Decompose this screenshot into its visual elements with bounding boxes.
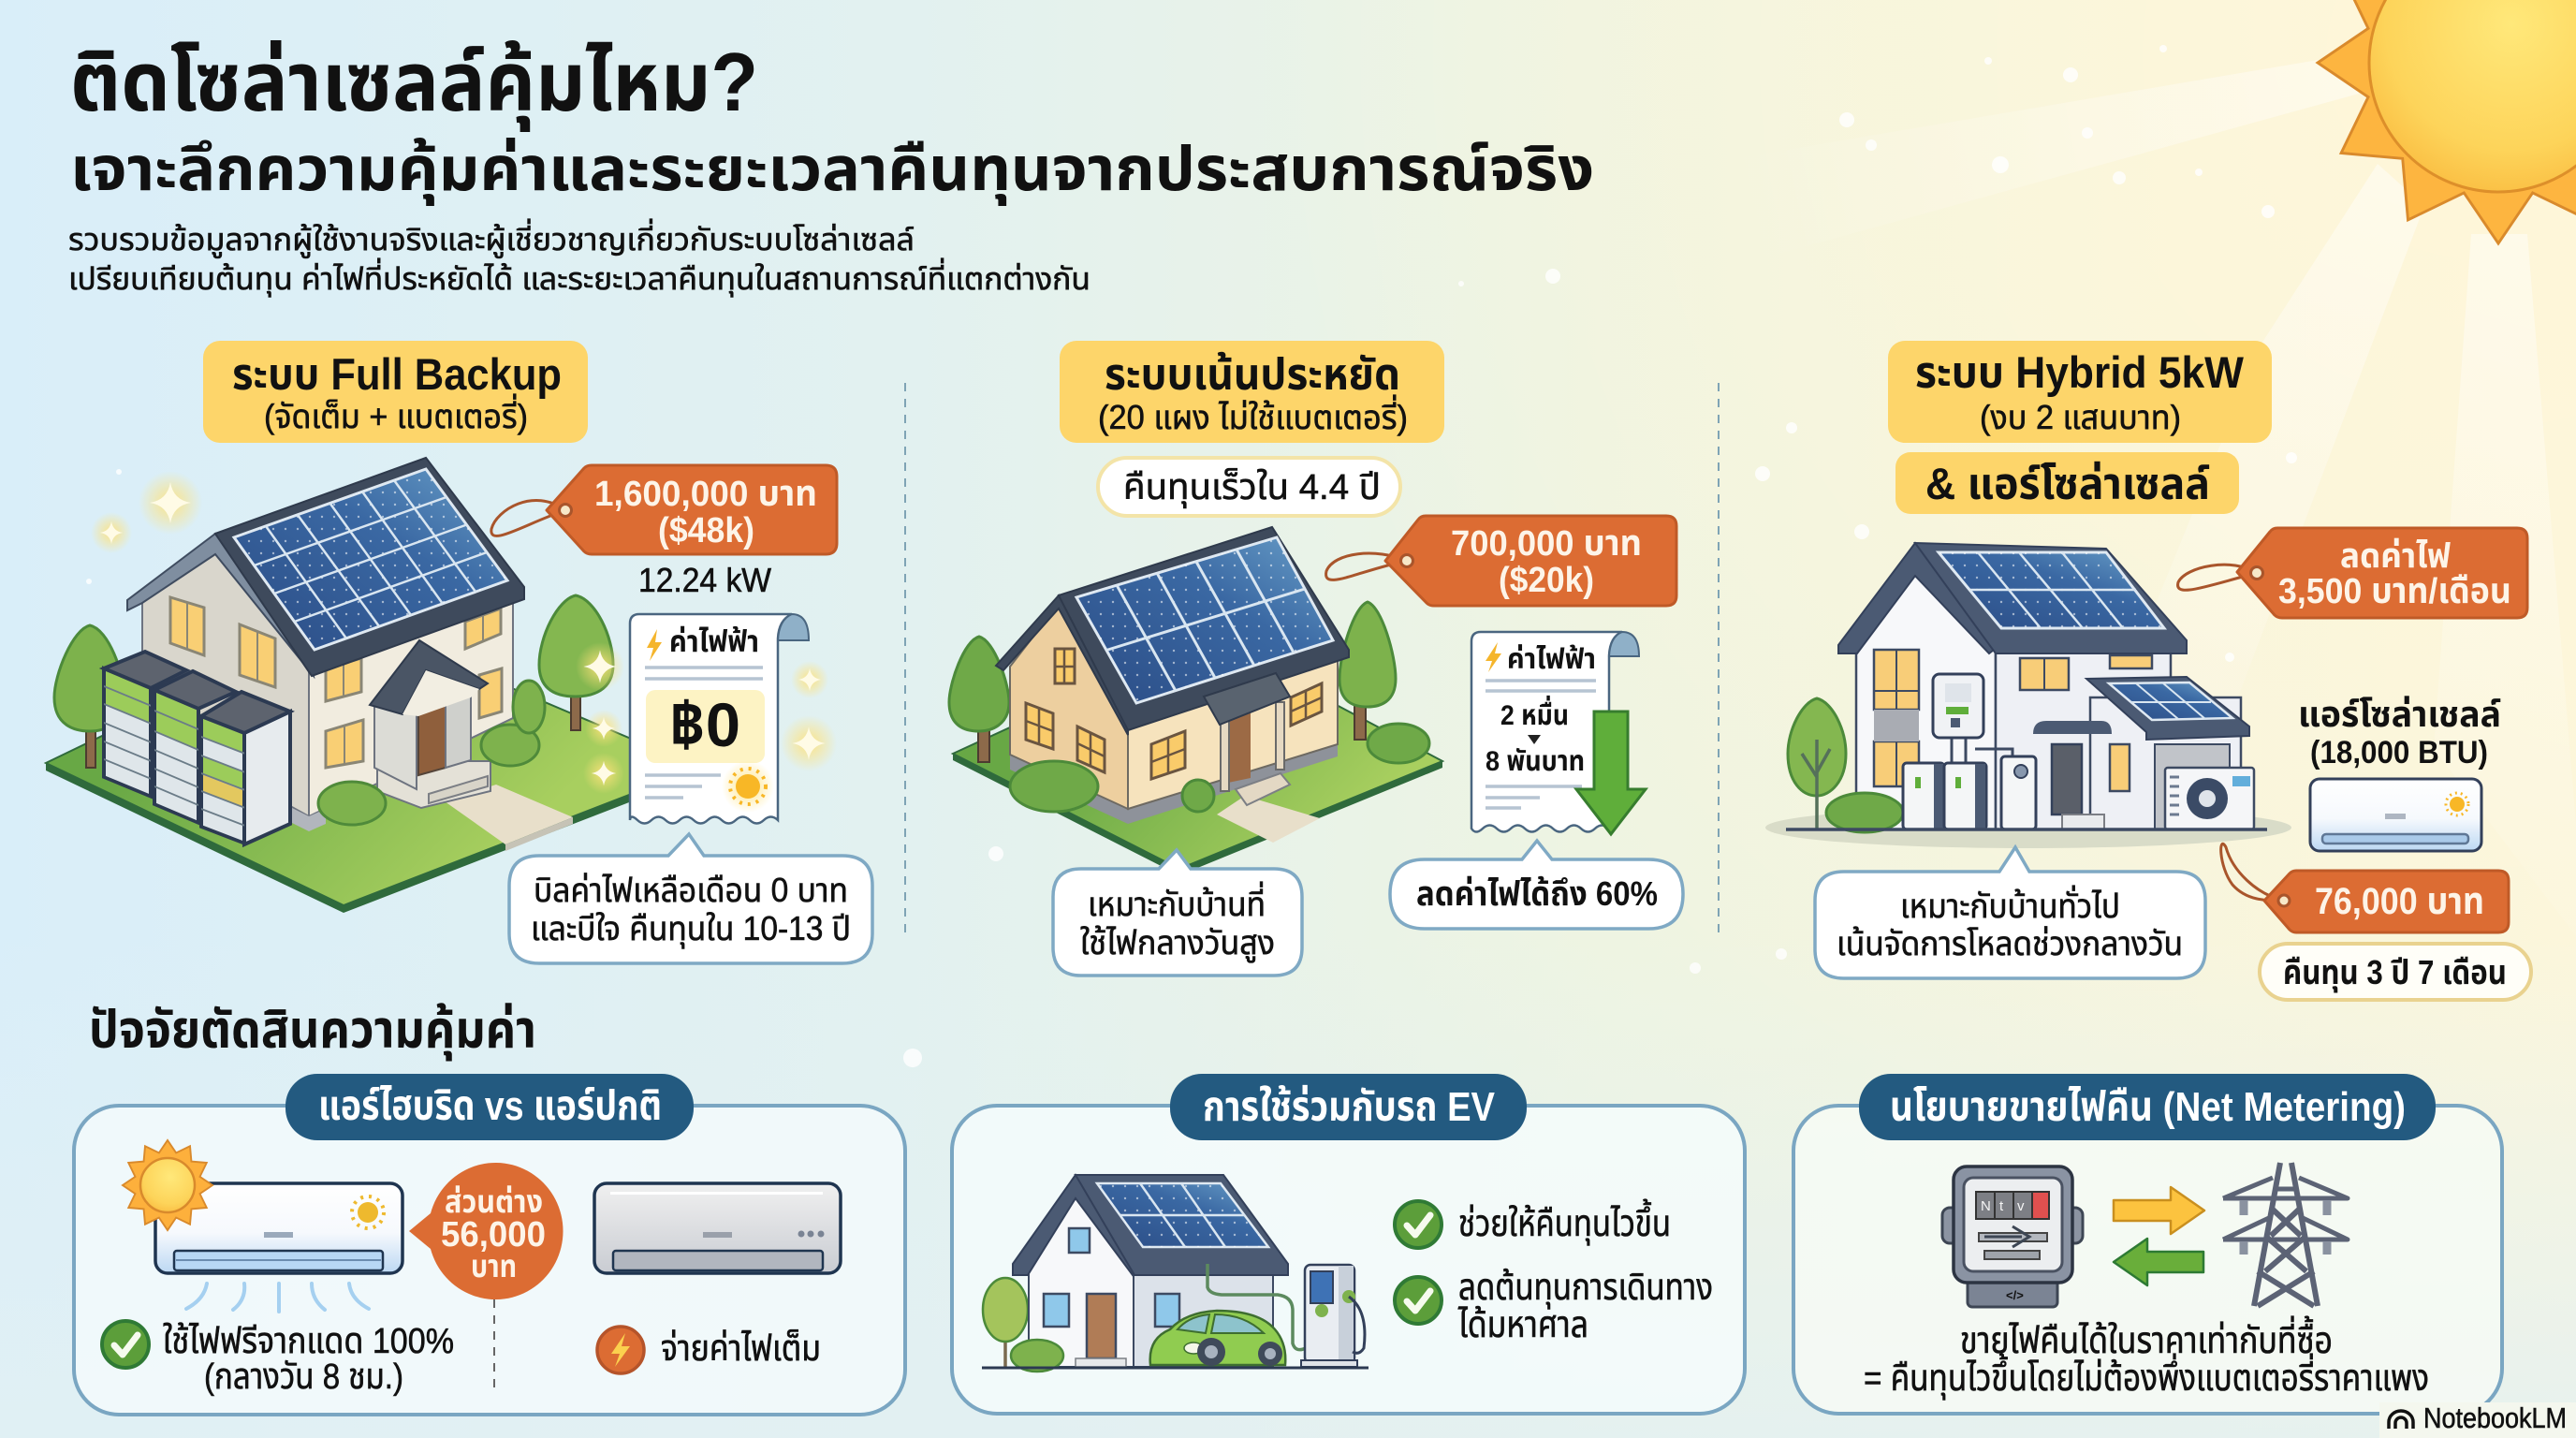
heading: savings: [1060, 341, 1444, 443]
price tag: 1,600,000 บาท: [594, 475, 817, 514]
price tag: 700,000 บาท: [1451, 524, 1642, 564]
label: solar air conditioner: แอร์โซล่าเชลล์: [2298, 696, 2501, 735]
callout: price difference: [409, 1163, 564, 1299]
system size: 12.24 kW: [638, 561, 771, 599]
callout: price difference: บาท: [471, 1249, 517, 1284]
panel: hybrid vs normal AC: [74, 1074, 905, 1415]
benefit: lower travel cost: ลดต้นทุนการเดินทาง: [1458, 1268, 1713, 1309]
callout: daytime users: [1053, 850, 1302, 976]
outdoor AC unit: [2165, 768, 2254, 829]
subtitle: เจาะลึกความคุ้มค่าและระยะเวลาคืนทุนจากประสบการณ์จริง: [70, 134, 1594, 206]
panel title: การใช้ร่วมกับรถ EV: [1203, 1084, 1496, 1130]
tag: saves 3,500 baht per month: 3,500 บาท/เดือน: [2278, 572, 2511, 611]
inverter and batteries: [1903, 674, 2036, 829]
illustration: modern house: [1765, 543, 2291, 848]
shrub: [1826, 793, 1903, 832]
heading: decision factors: ปัจจัยตัดสินความคุ้มค่า: [89, 1000, 536, 1062]
intro line 1: รวบรวมข้อมูลจากผู้ใช้งานจริงและผู้เชี่ยวชาญเกี่ยวกับระบบโซล่าเซลล์: [68, 218, 915, 258]
bill: reduced: 8 พันบาท: [1486, 746, 1585, 777]
arrow: savings down: [1576, 712, 1646, 834]
icon: electric meter: t: [1999, 1198, 2004, 1214]
heading: Full Backup: (จัดเต็ม + แบตเตอรี่): [264, 393, 528, 435]
heading: hybrid: [1888, 341, 2272, 443]
icon: sun: [123, 1140, 212, 1230]
heading: savings: (20 แผง ไม่ใช้แบตเตอรี่): [1098, 394, 1408, 436]
icon: air conditioner: [2310, 779, 2481, 851]
tag: saves 3,500 baht per month: [2178, 528, 2527, 618]
bill: reduced: 2 หมื่น: [1500, 695, 1569, 731]
porch: [1204, 673, 1290, 805]
right tree: [539, 595, 613, 730]
title: ติดโซล่าเซลล์คุ้มไหม?: [70, 36, 758, 132]
tree: [983, 1278, 1028, 1367]
wire: [1208, 1264, 1322, 1350]
panel title: [1859, 1074, 2436, 1140]
icon: power tower: [2223, 1163, 2348, 1306]
benefit: lower travel cost: ได้มหาศาล: [1457, 1305, 1588, 1345]
arrow: sell to grid: [2114, 1187, 2204, 1234]
shrub: [318, 681, 545, 825]
heading: hybrid: ระบบ Hybrid 5kW: [1915, 347, 2245, 397]
illustration: house without batteries: [949, 527, 1442, 875]
car: [1150, 1311, 1285, 1366]
bill: zero baht: [630, 614, 809, 824]
icon: electric meter: [1942, 1167, 2083, 1307]
description: ขายไฟคืนได้ในราคาเท่ากับที่ซื้อ: [1960, 1315, 2333, 1361]
benefit: free daytime power: (กลางวัน 8 ชม.): [204, 1357, 403, 1397]
benefit: lower travel cost: [1395, 1268, 1713, 1345]
door and awning: [2033, 721, 2112, 829]
arrow: buy from grid: [2114, 1239, 2203, 1285]
column dividers: [905, 383, 1719, 939]
price tag: [491, 465, 837, 554]
icon: electric meter: </>: [2006, 1288, 2024, 1302]
left tree: [949, 637, 1009, 762]
panel title: นโยบายขายไฟคืน (Net Metering): [1890, 1084, 2406, 1130]
price tag: [1326, 516, 1676, 606]
heading: Full Backup: ระบบ Full Backup: [232, 349, 562, 399]
callout: general homes: [1815, 847, 2205, 978]
right tree: [1339, 602, 1396, 740]
icon: airflow: [186, 1284, 369, 1312]
heading: Full Backup: [203, 341, 588, 443]
porch: [370, 640, 490, 808]
heading: solar air conditioner: & แอร์โซล่าเซลล์: [1925, 459, 2210, 508]
shrub: [1010, 724, 1429, 812]
description: [1864, 1315, 2429, 1400]
callout: save 60 percent: ลดค่าไฟได้ถึง 60%: [1416, 874, 1658, 913]
bill: reduced: [1471, 632, 1639, 831]
tree: [1788, 698, 1846, 829]
benefit: faster payback: [1395, 1198, 1671, 1248]
badge: payback 4.4 years: [1098, 458, 1400, 516]
benefit: free daytime power: [102, 1321, 454, 1397]
icon: electric meter: N: [1981, 1198, 1991, 1214]
drawback: full electric cost: [597, 1327, 821, 1373]
price tag: ($48k): [658, 511, 754, 550]
panel title: แอร์ไฮบริด vs แอร์ปกติ: [318, 1083, 662, 1129]
callout: zero bill: และบีใจ คืนทุนใน 10-13 ปี: [531, 909, 851, 948]
callout: zero bill: [509, 834, 872, 963]
heading: hybrid: (งบ 2 แสนบาท): [1980, 398, 2181, 436]
callout: daytime users: เหมาะกับบ้านที่: [1088, 881, 1266, 923]
badge: payback 3 years 7 months: คืนทุน 3 ปี 7 เดือน: [2283, 953, 2507, 992]
benefit: faster payback: ช่วยให้คืนทุนไวขึ้น: [1458, 1198, 1671, 1245]
illustration: house with EV: [982, 1175, 1368, 1372]
panel: EV use: [952, 1074, 1745, 1414]
illustration: house with batteries: [46, 458, 837, 913]
panel: hybrid system: [1765, 341, 2531, 1000]
label: solar air conditioner: [2298, 696, 2501, 770]
callout: daytime users: ใช้ไฟกลางวันสูง: [1080, 923, 1275, 962]
callout: general homes: เน้นจัดการโหลดช่วงกลางวัน: [1837, 924, 2183, 962]
callout: save 60 percent: [1390, 841, 1683, 929]
callout: general homes: เหมาะกับบ้านทั่วไป: [1900, 885, 2120, 925]
panel: Full Backup system: [46, 341, 872, 963]
bill: zero baht: ค่าไฟฟ้า: [669, 624, 759, 658]
watermark: NotebookLM: [2379, 1401, 2576, 1438]
charger: [1301, 1265, 1365, 1367]
panel title: [285, 1074, 694, 1140]
icon: normal AC: [594, 1183, 841, 1273]
icon: hybrid AC: [155, 1183, 402, 1273]
tag: saves 3,500 baht per month: ลดค่าไฟ: [2340, 536, 2451, 575]
panel: savings system: [949, 341, 1683, 976]
heading: savings: ระบบเน้นประหยัด: [1105, 349, 1400, 399]
sparkles: [91, 471, 837, 794]
bill: reduced: ค่าไฟฟ้า: [1507, 644, 1596, 675]
icon: electric meter: v: [2017, 1198, 2025, 1214]
callout: price difference: 56,000: [441, 1215, 546, 1255]
drawback: full electric cost: จ่ายค่าไฟเต็ม: [661, 1329, 821, 1369]
title block: [68, 36, 1594, 298]
badge: payback 3 years 7 months: [2260, 944, 2531, 1000]
callout: zero bill: บิลค่าไฟเหลือเดือน 0 บาท: [534, 871, 848, 909]
badge: payback 4.4 years: คืนทุนเร็วใน 4.4 ปี: [1123, 468, 1381, 508]
intro line 2: เปรียบเทียบต้นทุน ค่าไฟที่ประหยัดได้ และระยะเวลาคืนทุนในสถานการณ์ที่แตกต่างกัน: [68, 257, 1090, 298]
description: = คืนทุนไวขึ้นโดยไม่ต้องพึ่งแบตเตอรี่ราคาแพง: [1864, 1353, 2429, 1400]
panel: net metering: [1793, 1074, 2502, 1414]
left tree: [54, 625, 124, 768]
price tag: air conditioner: 76,000 บาท: [2315, 881, 2484, 922]
bill: zero baht: ฿0: [669, 690, 740, 759]
label: solar air conditioner: (18,000 BTU): [2310, 735, 2488, 770]
price tag: ($20k): [1499, 561, 1594, 600]
price tag: air conditioner: [2221, 844, 2509, 932]
callout: price difference: ส่วนต่าง: [445, 1184, 543, 1220]
battery stack: [104, 652, 290, 844]
panel title: [1170, 1074, 1527, 1140]
benefit: free daytime power: ใช้ไฟฟรีจากแดด 100%: [163, 1322, 454, 1361]
icon: sun top right: [2318, 0, 2576, 243]
